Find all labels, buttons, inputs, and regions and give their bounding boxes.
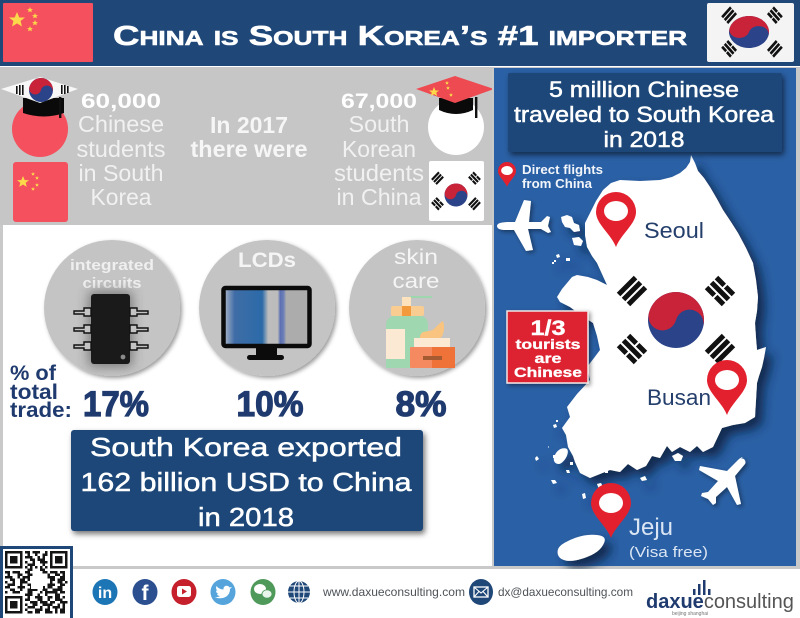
logo: daxue consulting: beijing shanghai: [672, 611, 708, 617]
text: South Korean students in China: Korean: [342, 136, 416, 162]
callout: one third of tourists: are: [534, 351, 562, 366]
icon: Chinese student with Korean cap: [1, 75, 78, 157]
label: Jeju: Jeju: [629, 514, 673, 541]
map: Jeju island: [558, 535, 605, 561]
callout: 5 million Chinese travelers: 5 million Chinese: [549, 77, 739, 102]
callout: one third of tourists: tourists: [516, 337, 580, 352]
chart item: integrated circuits: [44, 240, 180, 376]
icon: plane west: [497, 200, 551, 251]
QR code: [0, 546, 73, 618]
text: South Korean students in China: in China: [336, 184, 422, 210]
map: South Korea: [535, 155, 766, 499]
callout: exports total: [71, 430, 423, 532]
number: 8%: 8%: [396, 385, 446, 424]
panel: student exchange: [0, 67, 494, 225]
callout: one third of tourists: Chinese: [514, 365, 583, 380]
text: website: www.daxueconsulting.com: [322, 585, 465, 599]
icon: Twitter: [210, 579, 236, 605]
chart item: integrated circuits: integrated: [70, 257, 154, 274]
text: Chinese students in South Korea: in South: [78, 160, 164, 186]
text: Chinese students in South Korea: 60,000: [81, 90, 161, 113]
icon: LinkedIn: in: [98, 585, 112, 602]
label: visa free: (Visa free): [629, 544, 708, 561]
icon: China flag: [13, 162, 68, 222]
pin: Seoul: [596, 192, 636, 247]
icon: Facebook: f: [142, 582, 150, 605]
text: Chinese students in South Korea: Korea: [90, 184, 152, 210]
icon: YouTube: [172, 579, 196, 605]
panel: export products: [0, 225, 492, 567]
label: Busan: Busan: [647, 385, 711, 410]
callout: one third of tourists: [507, 311, 588, 383]
callout: exports total: South Korea exported: [90, 432, 402, 462]
footer: [0, 546, 794, 618]
pin: Jeju: [591, 483, 631, 538]
header bar: [0, 0, 800, 66]
icon: LinkedIn: [92, 579, 118, 605]
icon: Korean student with Chinese cap: [416, 76, 494, 155]
number: 17%: 17%: [83, 385, 149, 424]
legend: direct flights: [498, 162, 603, 191]
callout: exports total: 162 billion USD to China: [80, 467, 412, 497]
label: % of total trade: trade:: [10, 399, 72, 422]
icon: WeChat: [250, 579, 276, 605]
callout: exports total: in 2018: [198, 502, 294, 532]
text: email: dx@daxueconsulting.com: [498, 585, 633, 599]
legend: direct flights: from China: [522, 177, 593, 191]
text: South Korean students in China: [334, 90, 424, 210]
logo: daxue consulting: daxueconsulting: [646, 591, 794, 613]
panel: tourism map: [492, 67, 800, 569]
chart item: skin care: [349, 240, 485, 376]
chart item: skin care: care: [392, 270, 440, 293]
label: % of total trade: % of: [10, 362, 57, 385]
legend: direct flights: Direct flights: [522, 163, 603, 177]
chart item: integrated circuits: circuits: [82, 275, 142, 292]
label: % of total trade: total: [10, 381, 58, 404]
chart item: LCDs: [199, 240, 335, 376]
text: South Korean students in China: South: [348, 111, 410, 137]
callout: 5 million Chinese travelers: traveled to South Korea: [514, 102, 775, 127]
text: In 2017 there were: there were: [190, 136, 308, 162]
icon: Facebook: [132, 579, 158, 605]
text: In 2017 there were: In 2017: [210, 112, 288, 138]
logo: daxue consulting: [646, 580, 794, 617]
icon: Korean flag on map: [617, 276, 735, 364]
flag: South Korea: [707, 3, 794, 62]
text: South Korean students in China: students: [334, 160, 424, 186]
chart item: LCDs: LCDs: [238, 249, 296, 272]
chart item: skin care: skin: [394, 246, 438, 269]
icon: South Korea flag: [429, 161, 484, 221]
number: 10%: 10%: [236, 385, 304, 424]
icon: website globe: [288, 581, 310, 603]
callout: 5 million Chinese travelers: [508, 73, 782, 152]
callout: 5 million Chinese travelers: in 2018: [604, 127, 684, 152]
callout: one third of tourists: 1/3: [530, 317, 566, 340]
text: In 2017 there were: [190, 112, 308, 162]
label: % of total trade: [10, 362, 72, 422]
text: Chinese students in South Korea: students: [76, 136, 166, 162]
heading: China is South Korea’s #1 importer: [113, 20, 688, 51]
icon: email: [469, 579, 493, 605]
pin: Busan: [707, 360, 747, 415]
text: South Korean students in China: 67,000: [341, 90, 417, 113]
label: Seoul: Seoul: [644, 218, 704, 243]
text: Chinese students in South Korea: Chinese: [78, 111, 164, 137]
text: Chinese students in South Korea: [76, 90, 166, 210]
flag: China: [3, 3, 93, 62]
icon: plane south-east: [699, 457, 746, 505]
